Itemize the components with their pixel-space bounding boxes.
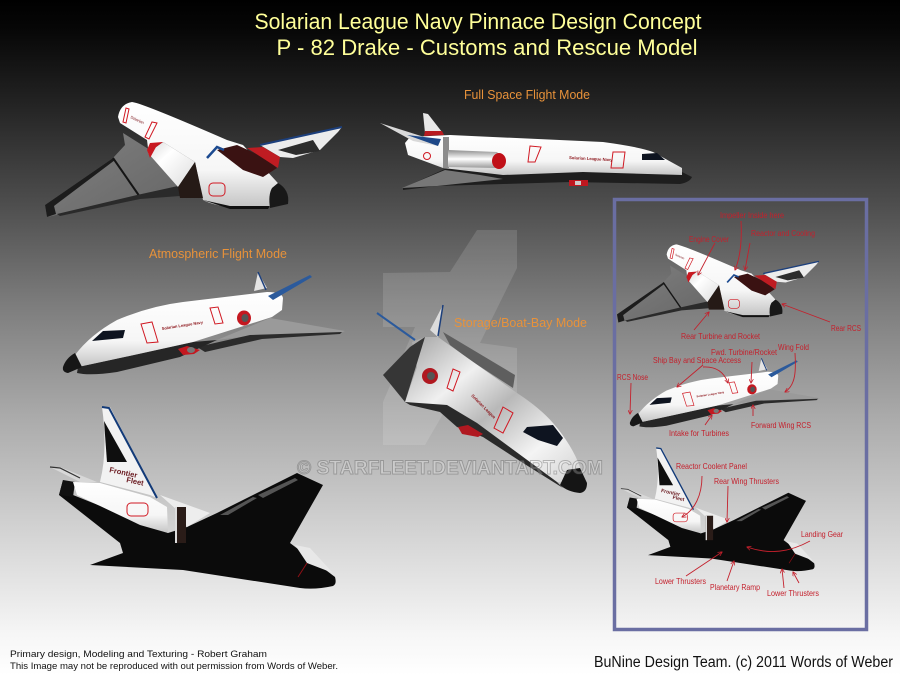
callout labels: Intake for Turbines xyxy=(669,428,729,438)
heading: full space flight mode: Full Space Flight Mode xyxy=(464,88,590,102)
callout labels: Reactor Coolent Panel xyxy=(676,461,747,471)
callout labels: Engine Cover xyxy=(689,234,729,244)
callout labels: Ship Bay and Space Access xyxy=(653,355,741,365)
annotated ship: top view xyxy=(617,244,819,323)
callout labels: Planetary Ramp xyxy=(710,582,760,592)
ship: atmospheric flight mode xyxy=(63,272,345,374)
callout labels: RCS Nose xyxy=(617,372,648,382)
annotated ship: side view xyxy=(630,358,820,427)
callout labels: Lower Thrusters xyxy=(655,576,706,586)
ship: storage / boat-bay mode xyxy=(377,305,587,493)
callout labels: Rear RCS xyxy=(831,323,861,333)
credits: This Image may not be reproduced with out permission from Words of Weber. xyxy=(10,661,338,672)
ship: full space flight mode xyxy=(380,113,692,190)
callout labels: Rear Wing Thrusters xyxy=(714,476,779,486)
callout labels: Fwd. Turbine/Rocket xyxy=(711,347,778,357)
ship: storage / boat-bay mode: Solarian League xyxy=(470,393,497,420)
title: P - 82 Drake - Customs and Rescue Model xyxy=(276,35,698,60)
callout arrows xyxy=(630,221,830,588)
callout labels: Impeller Inside here xyxy=(720,210,784,220)
title xyxy=(254,9,702,60)
callout labels: Landing Gear xyxy=(801,529,843,539)
watermark logo xyxy=(383,230,517,445)
panel frame xyxy=(614,200,866,630)
watermark text: © STARFLEET.DEVIANTART.COM xyxy=(297,458,603,479)
annotated ship: belly view xyxy=(621,448,815,571)
credits xyxy=(10,649,338,672)
heading: storage mode: Storage/Boat-Bay Mode xyxy=(454,316,587,330)
ship: top view, wings deployed xyxy=(45,102,342,217)
ship: full space flight mode: Solarian League Navy xyxy=(569,155,613,162)
callout labels xyxy=(617,210,861,598)
callout labels: Rear Turbine and Rocket xyxy=(681,331,761,341)
panel: annotated callouts xyxy=(614,200,866,630)
callout labels: Forward Wing RCS xyxy=(751,420,811,430)
title: Solarian League Navy Pinnace Design Concept xyxy=(254,9,702,34)
credits: Primary design, Modeling and Texturing - Robert Graham xyxy=(10,649,267,660)
ship: belly view, Frontier Fleet xyxy=(50,407,336,589)
callout labels: Reactor and Cooling xyxy=(751,228,815,238)
callout labels: Wing Fold xyxy=(778,342,809,352)
heading: atmospheric flight mode: Atmospheric Flight Mode xyxy=(149,247,287,261)
callout labels: Lower Thrusters xyxy=(767,588,819,598)
